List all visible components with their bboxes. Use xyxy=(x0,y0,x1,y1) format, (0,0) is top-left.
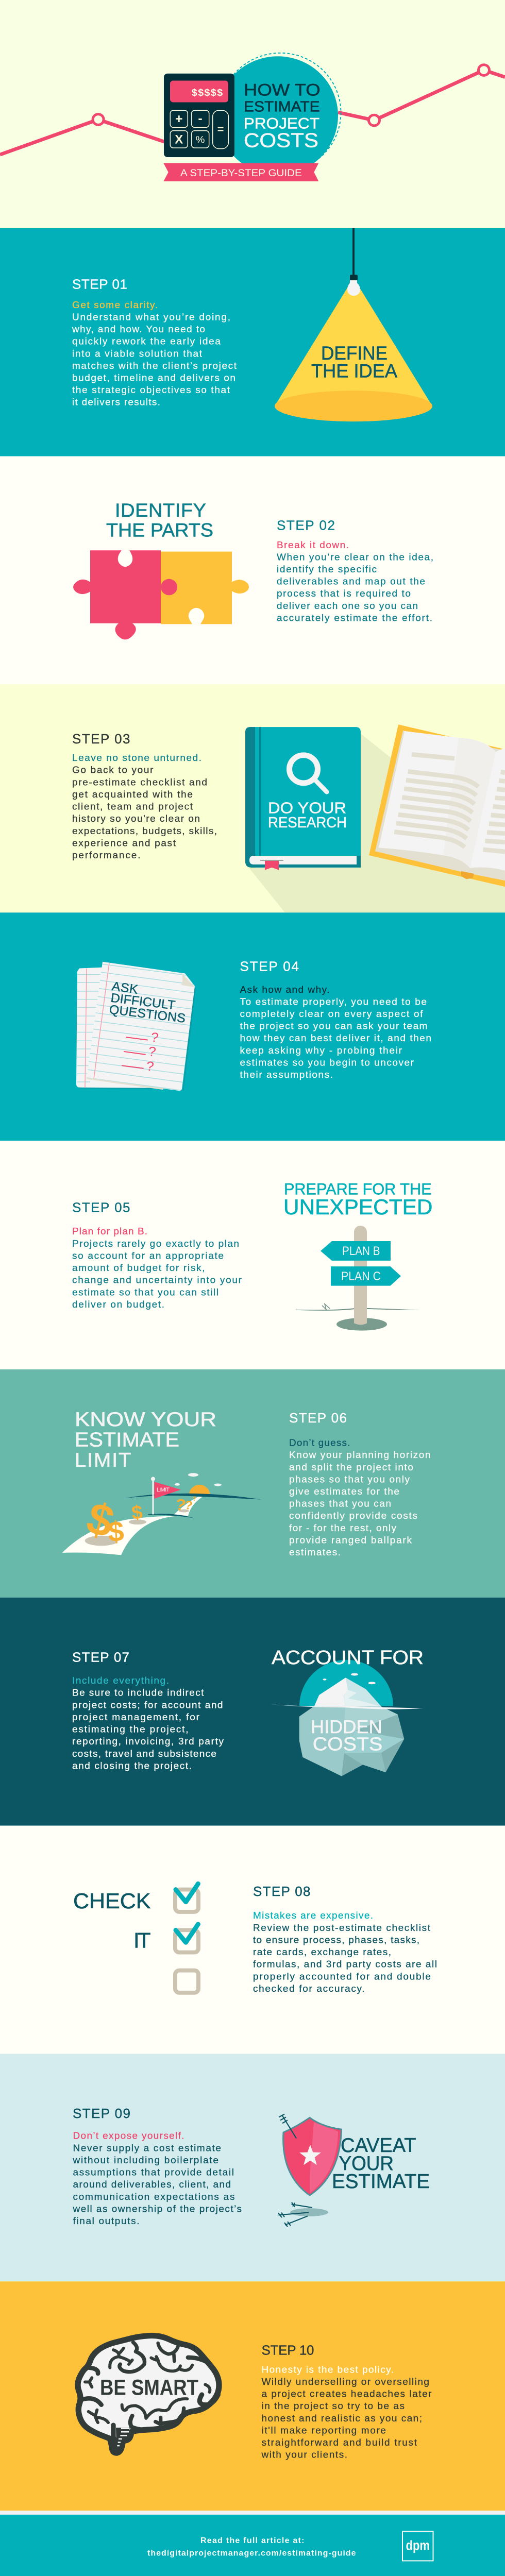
illustration: road to limit flag xyxy=(62,1473,261,1555)
illustration: iceberg: COSTS xyxy=(313,1734,382,1754)
body text: estimates. xyxy=(289,1547,341,1557)
logo: dpm: dpm xyxy=(406,2538,430,2553)
panel: step 02 xyxy=(0,456,505,684)
body text: project management, for xyxy=(72,1711,199,1722)
body text: reporting, invoicing, 3rd party xyxy=(72,1736,224,1747)
body text: with your clients. xyxy=(261,2449,347,2460)
icon: calculator xyxy=(164,74,234,157)
body text: phases that you can xyxy=(289,1498,391,1509)
body text: their assumptions. xyxy=(240,1069,333,1080)
body text: accurately estimate the effort. xyxy=(277,613,432,623)
body text: Review the post-estimate checklist xyxy=(253,1922,431,1933)
body text: Be sure to include indirect xyxy=(72,1687,204,1698)
illustration title xyxy=(283,1180,433,1219)
illustration: road to limit flag: $ xyxy=(107,1515,125,1548)
body text: Understand what you’re doing, xyxy=(72,312,230,322)
body text: pre-estimate checklist and xyxy=(72,776,207,787)
body text: Wildly underselling or overselling xyxy=(262,2376,429,2387)
body text: Don’t guess. xyxy=(289,1437,350,1448)
body text xyxy=(277,539,433,623)
logo: dpm xyxy=(402,2531,433,2561)
illustration: question papers: QUESTIONS xyxy=(108,1003,186,1026)
body text: costs, travel and subsistence xyxy=(72,1748,216,1759)
body text: Projects rarely go exactly to plan xyxy=(72,1238,239,1249)
body text: Ask how and why. xyxy=(240,984,330,995)
step heading: STEP 03 xyxy=(72,732,130,747)
body text: To estimate properly, you need to be xyxy=(240,996,427,1007)
panel: step 03 xyxy=(0,684,505,912)
body text xyxy=(72,1226,242,1310)
ribbon subtitle xyxy=(163,163,318,181)
illustration: question papers xyxy=(76,961,201,1093)
body text: rate cards, exchange rates, xyxy=(253,1946,391,1957)
illustration: signpost: PLAN C xyxy=(341,1269,381,1283)
illustration: check it list xyxy=(73,1884,198,1993)
body text: so account for an appropriate xyxy=(72,1250,224,1261)
body text: Include everything. xyxy=(72,1675,169,1686)
illustration: signpost xyxy=(296,1226,420,1331)
illustration title: THE PARTS xyxy=(106,519,213,541)
line chart decoration with nodes xyxy=(0,65,505,155)
panel: step 07 xyxy=(0,1598,505,1826)
footer link text: Read the full article at: xyxy=(200,2536,304,2545)
body text: assumptions that provide detail xyxy=(73,2167,234,2178)
illustration: signpost: PLAN B xyxy=(342,1244,380,1258)
body text: experience and past xyxy=(72,838,176,848)
illustration: jigsaw pieces xyxy=(73,550,249,639)
body text: final outputs. xyxy=(73,2215,140,2226)
illustration: road to limit flag: $ xyxy=(81,1493,119,1547)
title: PROJECT xyxy=(244,115,319,132)
step heading: STEP 06 xyxy=(289,1411,347,1426)
icon: calculator: - xyxy=(198,112,203,126)
illustration: shield and arrows xyxy=(278,2114,430,2227)
illustration: road to limit flag: ? xyxy=(192,1495,196,1502)
body text: deliverables and map out the xyxy=(277,576,425,587)
long shadow xyxy=(247,734,505,912)
illustration title: UNEXPECTED xyxy=(283,1195,433,1219)
illustration: question papers: DIFFICULT xyxy=(110,991,176,1013)
body text: Know your planning horizon xyxy=(289,1449,431,1460)
title xyxy=(244,80,321,151)
body text: the strategic objectives so that xyxy=(72,384,230,395)
icon: calculator: + xyxy=(175,112,183,126)
icon: calculator: = xyxy=(217,123,224,135)
body text: Plan for plan B. xyxy=(72,1226,147,1236)
illustration: closed book: RESEARCH xyxy=(268,815,347,831)
body text xyxy=(253,1910,437,1994)
body text: straightforward and build trust xyxy=(262,2437,417,2448)
illustration title: PREPARE FOR THE xyxy=(284,1180,432,1198)
body text: communication expectations as xyxy=(73,2191,235,2202)
body text: Break it down. xyxy=(277,539,349,550)
body text: Never supply a cost estimate xyxy=(73,2142,221,2153)
illustration: iceberg xyxy=(270,1647,424,1776)
panel: step 09 xyxy=(0,2054,505,2281)
panel: step 08 xyxy=(0,1826,505,2054)
body text: confidently provide costs xyxy=(289,1510,417,1521)
panel: step 05 xyxy=(0,1141,505,1369)
body text: in the project so try to be as xyxy=(262,2400,405,2411)
body text: Honesty is the best policy. xyxy=(262,2364,394,2375)
body text xyxy=(72,299,237,408)
illustration: shield and arrows: YOUR xyxy=(339,2152,394,2175)
footer link text: thedigitalprojectmanager.com/estimating-guide xyxy=(147,2549,356,2558)
illustration: check it list: IT xyxy=(133,1928,150,1953)
body text: amount of budget for risk, xyxy=(72,1262,205,1273)
step heading: STEP 09 xyxy=(73,2107,130,2121)
panel: step 01 xyxy=(0,228,505,456)
body text: estimates so you begin to uncover xyxy=(240,1057,414,1067)
body text: Mistakes are expensive. xyxy=(253,1910,373,1921)
panel: step 04 xyxy=(0,912,505,1141)
body text: deliver on budget. xyxy=(72,1299,164,1310)
illustration: hanging lamp: THE IDEA xyxy=(311,360,398,382)
illustration: question papers: ASK xyxy=(111,979,139,997)
body text: budget, timeline and delivers on xyxy=(72,372,235,383)
illustration title xyxy=(106,500,213,541)
body text: get acquainted with the xyxy=(72,789,193,800)
body text: to ensure process, phases, tasks, xyxy=(253,1935,419,1945)
body text: why, and how. You need to xyxy=(72,324,205,334)
illustration: shield and arrows: ESTIMATE xyxy=(332,2170,430,2193)
illustration: closed book xyxy=(245,727,361,870)
body text xyxy=(240,984,431,1080)
body text: Leave no stone unturned. xyxy=(72,752,201,763)
body text xyxy=(289,1437,431,1557)
panel: footer xyxy=(0,2511,505,2576)
illustration: road to limit flag: ? xyxy=(184,1498,194,1513)
body text: process that is required to xyxy=(277,588,411,599)
step heading: STEP 07 xyxy=(72,1651,129,1665)
body text xyxy=(72,1675,224,1771)
illustration: road to limit flag: $ xyxy=(131,1501,143,1523)
body text: keep asking why - probing their xyxy=(240,1045,402,1056)
body text: it'll make reporting more xyxy=(262,2425,386,2435)
body text: change and uncertainty into your xyxy=(72,1275,242,1285)
illustration: brain xyxy=(78,2335,219,2453)
illustration: open book xyxy=(369,724,505,887)
illustration: question papers: ? xyxy=(145,1059,155,1074)
body text: deliver each one so you can xyxy=(277,600,418,611)
body text: history so you're clear on xyxy=(72,813,200,824)
body text: a project creates headaches later xyxy=(262,2388,432,2399)
body text: checked for accuracy. xyxy=(253,1983,365,1994)
illustration: shield and arrows: CAVEAT xyxy=(341,2134,416,2157)
illustration: road to limit flag: ? xyxy=(174,1495,187,1515)
body text: matches with the client’s project xyxy=(72,360,237,371)
icon: calculator: X xyxy=(175,133,183,146)
body text: how they can best deliver it, and then xyxy=(240,1032,431,1043)
body text xyxy=(261,2364,432,2460)
title: HOW TO xyxy=(244,80,321,99)
body text: into a viable solution that xyxy=(72,348,203,359)
body text: without including boilerplate xyxy=(72,2155,218,2165)
body text: Get some clarity. xyxy=(72,299,158,310)
illustration title xyxy=(75,1408,216,1471)
ribbon subtitle: A STEP-BY-STEP GUIDE xyxy=(180,167,302,179)
illustration: iceberg: ACCOUNT FOR xyxy=(272,1647,424,1669)
body text: formulas, and 3rd party costs are all xyxy=(253,1959,437,1970)
icon: calculator: $$$$$ xyxy=(192,87,223,98)
body text: performance. xyxy=(72,850,141,860)
panel: step 06 xyxy=(0,1369,505,1598)
body text: the project so you can ask your team xyxy=(240,1021,428,1031)
illustration: question papers: ? xyxy=(150,1030,159,1045)
illustration: hanging lamp: DEFINE xyxy=(321,342,388,364)
body text: expectations, budgets, skills, xyxy=(72,825,217,836)
body text: estimating the project, xyxy=(72,1724,189,1734)
step heading: STEP 04 xyxy=(240,960,299,974)
step heading: STEP 05 xyxy=(72,1201,130,1215)
body text: give estimates for the xyxy=(289,1486,399,1497)
step heading: STEP 01 xyxy=(72,278,127,292)
body text: and split the project into xyxy=(289,1462,413,1472)
body text: for - for the rest, only xyxy=(289,1522,397,1533)
body text: Don’t expose yourself. xyxy=(73,2130,184,2141)
body text: quickly rework the early idea xyxy=(72,336,221,347)
title: ESTIMATE xyxy=(244,99,320,115)
body text xyxy=(72,752,217,860)
illustration title: LIMIT xyxy=(75,1449,131,1471)
illustration title: KNOW YOUR xyxy=(75,1408,216,1431)
icon: calculator: % xyxy=(196,134,205,145)
body text: properly accounted for and double xyxy=(253,1971,431,1981)
footer link text xyxy=(147,2536,356,2558)
illustration: hanging lamp xyxy=(275,228,432,421)
body text: When you’re clear on the idea, xyxy=(277,552,433,562)
illustration: check it list: CHECK xyxy=(73,1889,151,1913)
panel: header xyxy=(0,0,505,228)
teal title circle xyxy=(217,53,341,175)
body text: around deliverables, client, and xyxy=(73,2179,231,2190)
panel: step 10 xyxy=(0,2281,505,2511)
illustration: closed book: DO YOUR xyxy=(268,799,346,817)
body text: client, team and project xyxy=(72,801,193,812)
body text: provide ranged ballpark xyxy=(289,1535,412,1545)
body text: estimate so that you can still xyxy=(72,1286,218,1297)
body text: and closing the project. xyxy=(72,1760,192,1771)
title: COSTS xyxy=(244,129,318,151)
step heading: STEP 02 xyxy=(277,519,335,533)
illustration: road to limit flag: LIMIT xyxy=(157,1487,170,1493)
illustration: iceberg: HIDDEN xyxy=(311,1716,382,1737)
step heading: STEP 10 xyxy=(262,2344,314,2358)
body text: it delivers results. xyxy=(72,397,160,408)
illustration title: ESTIMATE xyxy=(75,1429,179,1451)
body text: well as ownership of the project’s xyxy=(72,2204,242,2214)
body text: project costs; for account and xyxy=(72,1699,223,1710)
body text xyxy=(72,2130,242,2226)
illustration: brain: BE SMART xyxy=(100,2376,198,2400)
step heading: STEP 08 xyxy=(253,1885,311,1899)
body text: identify the specific xyxy=(277,564,377,574)
body text: Go back to your xyxy=(72,765,154,775)
body text: completely clear on every aspect of xyxy=(240,1008,423,1019)
body text: honest and realistic as you can; xyxy=(262,2413,422,2424)
illustration title: IDENTIFY xyxy=(115,500,206,521)
illustration: question papers: ? xyxy=(147,1044,157,1059)
body text: phases so that you only xyxy=(289,1474,410,1484)
